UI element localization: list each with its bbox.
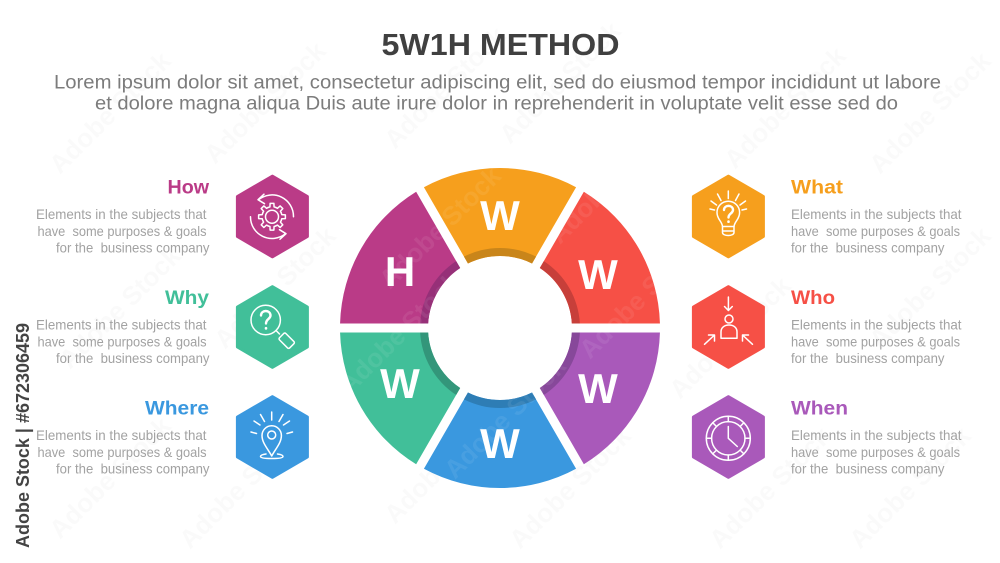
stock watermark pattern: Adobe Stock: [43, 45, 177, 179]
stock watermark pattern: Adobe Stock: [378, 20, 512, 154]
description: how: Elements in the subjects that: [36, 206, 207, 222]
description: when: have some purposes & goals: [791, 444, 960, 460]
description: why: have some purposes & goals: [38, 334, 206, 350]
description: how: [36, 206, 210, 256]
icon: magnifier with question mark: [251, 305, 295, 349]
description: what: for the business company: [791, 240, 944, 256]
hexagon: who: [693, 287, 763, 367]
description: how: for the business company: [56, 240, 210, 256]
panel: where: [36, 397, 307, 477]
hexagon: how: [237, 176, 307, 257]
description: when: [791, 427, 962, 477]
description: who: for the business company: [791, 350, 944, 366]
description: where: have some purposes & goals: [38, 444, 206, 460]
heading: why: Why: [165, 288, 209, 309]
hexagon: when: [693, 397, 763, 477]
stock watermark pattern: Adobe Stock: [718, 40, 852, 174]
description: where: for the business company: [56, 461, 210, 477]
stock watermark pattern: Adobe Stock: [378, 395, 512, 529]
stock watermark over coloured shapes: Adobe Stock: [438, 350, 572, 484]
stock watermark over coloured shapes: Adobe Stock: [373, 160, 507, 294]
hexagon: where: [237, 397, 307, 477]
heading: how: How: [168, 177, 209, 198]
description: why: Elements in the subjects that: [36, 316, 207, 332]
panel: what: [693, 176, 962, 257]
hexagon: what: [693, 176, 763, 257]
stock watermark pattern: Adobe Stock: [43, 410, 177, 544]
description: who: Elements in the subjects that: [791, 316, 962, 332]
subtitle: Lorem ipsum dolor sit amet, consectetur adipiscing elit, sed do eiusmod tempor incididunt ut labore: [54, 72, 941, 94]
segment: what (top): [424, 168, 576, 264]
icon: light bulb with question mark: [710, 191, 746, 236]
description: how: have some purposes & goals: [38, 223, 206, 239]
stock watermark pattern: Adobe Stock: [863, 220, 997, 354]
stock watermark pattern: Adobe Stock: [173, 420, 307, 554]
panel: how: [36, 176, 307, 257]
panel: when: [693, 397, 962, 477]
stock watermark over coloured shapes: [333, 115, 707, 484]
stock watermark pattern: Adobe Stock: [663, 270, 797, 404]
segment: who (upper right): [540, 192, 660, 324]
heading: what: What: [791, 177, 844, 198]
stock watermark pattern: Adobe Stock: [503, 420, 637, 554]
stock watermark pattern: Adobe Stock: [843, 420, 977, 554]
stock watermark over coloured shapes: Adobe Stock: [573, 230, 707, 364]
panel: why: [36, 287, 307, 367]
icon: gear with circular arrows: [250, 194, 294, 239]
stock watermark over coloured shapes: Adobe Stock: [333, 265, 467, 399]
segment: why (lower left): W: [380, 360, 420, 407]
segment: where (bottom): W: [480, 420, 520, 467]
icon: location pin with rays: [251, 412, 292, 458]
description: who: [791, 316, 962, 366]
description: why: for the business company: [56, 350, 210, 366]
segment: why (lower left): [340, 332, 460, 464]
description: what: Elements in the subjects that: [791, 206, 962, 222]
description: who: have some purposes & goals: [791, 334, 960, 350]
heading: who: Who: [791, 288, 835, 309]
segment: when (lower right): W: [578, 365, 618, 412]
stock watermark pattern: Adobe Stock: [703, 420, 837, 554]
stock watermark pattern: Adobe Stock: [198, 35, 332, 169]
segment: what (top): W: [480, 192, 520, 239]
icon: person with three arrows: [704, 297, 752, 344]
description: when: Elements in the subjects that: [791, 427, 962, 443]
subtitle: et dolore magna aliqua Duis aute irure dolor in reprehenderit in voluptate velit esse sed do: [95, 94, 898, 114]
icon: clock: [706, 416, 750, 460]
donut chart: six segments: [340, 168, 660, 488]
stock watermark pattern: Adobe Stock: [53, 240, 187, 374]
segment: when (lower right): [540, 332, 660, 464]
heading: where: Where: [145, 399, 209, 420]
panel: who: [693, 287, 962, 367]
vertical stock credit: Adobe Stock | #672306459: [13, 323, 33, 548]
description: what: [791, 206, 962, 256]
stock watermark pattern: Adobe Stock: [208, 220, 342, 354]
description: when: for the business company: [791, 461, 944, 477]
segment: how (upper left): [340, 192, 460, 324]
stock watermark pattern: Adobe Stock: [863, 45, 997, 179]
stock watermark pattern: Adobe Stock: [493, 15, 627, 149]
segment: who (upper right): W: [578, 251, 618, 298]
description: where: Elements in the subjects that: [36, 427, 207, 443]
title: 5W1H METHOD: [382, 27, 620, 62]
description: what: have some purposes & goals: [791, 223, 960, 239]
segment: where (bottom): [424, 392, 576, 488]
hexagon: why: [237, 287, 307, 367]
segment: how (upper left): H: [385, 248, 415, 295]
description: where: [36, 427, 210, 477]
heading: when: When: [791, 399, 848, 420]
stock watermark over coloured shapes: Adobe Stock: [543, 115, 677, 249]
description: why: [36, 316, 210, 366]
subtitle: [54, 72, 941, 114]
